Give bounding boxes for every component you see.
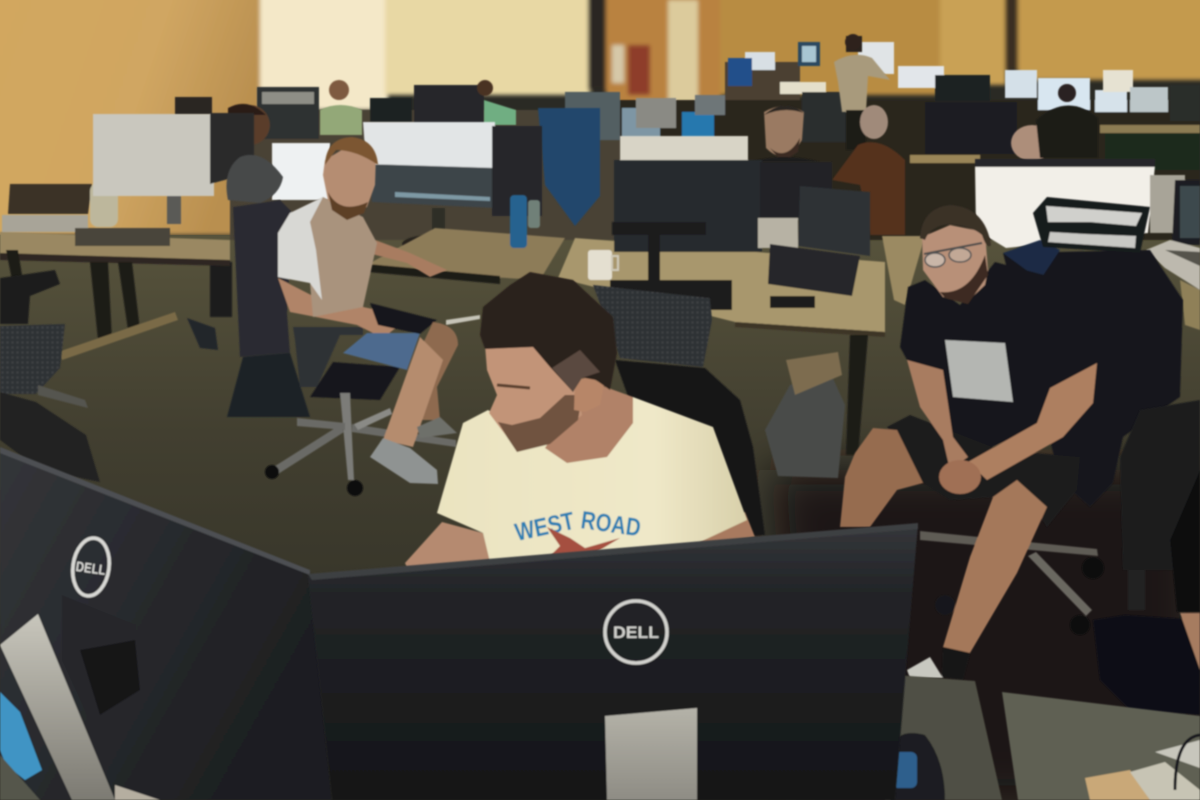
box by backpack bbox=[786, 352, 842, 395]
middle desk bbox=[368, 195, 565, 325]
monitor: white back bbox=[620, 136, 748, 163]
arm right bbox=[700, 512, 755, 545]
torso bbox=[900, 262, 1097, 455]
coworker: teal shirt bbox=[477, 80, 516, 125]
coworker: glasses in middle bbox=[750, 105, 820, 162]
background desks and monitors bbox=[175, 42, 1200, 240]
logo: Dell left: DELL bbox=[75, 558, 107, 578]
monitor: dark beside editor bbox=[492, 126, 542, 216]
laptop: far right bbox=[1146, 180, 1200, 290]
shoe bbox=[942, 647, 970, 680]
shirt bbox=[278, 197, 377, 317]
shirt print: ROAD bbox=[579, 506, 642, 542]
head bbox=[922, 225, 988, 302]
shoes bbox=[370, 438, 438, 484]
stickers bbox=[1085, 740, 1200, 800]
eye and brow bbox=[497, 385, 530, 388]
left desk monitors bbox=[93, 113, 542, 253]
shorts bbox=[343, 333, 420, 370]
man in black t-shirt, right bbox=[840, 197, 1183, 680]
headset bbox=[890, 733, 945, 800]
mug bbox=[588, 250, 618, 280]
man in cream t-shirt, centre bbox=[405, 272, 755, 570]
ear bbox=[574, 377, 604, 412]
chair: left man bbox=[226, 155, 456, 496]
legs bbox=[840, 428, 923, 527]
chair far left edge bbox=[0, 270, 100, 482]
centre desk bbox=[558, 136, 885, 455]
hair fade bbox=[552, 350, 600, 392]
head bbox=[323, 145, 376, 217]
legs bbox=[420, 322, 458, 420]
chair: frame by centre desk bbox=[610, 222, 732, 310]
monitor stand: left bbox=[0, 614, 115, 800]
arms bbox=[907, 360, 968, 470]
shorts bbox=[887, 415, 1080, 527]
desk corner left bbox=[0, 755, 40, 800]
monitor stand: centre bbox=[605, 708, 697, 800]
coworker: green shirt bbox=[320, 80, 362, 135]
arm left bbox=[405, 522, 490, 570]
monitor: silver back bbox=[93, 114, 214, 224]
shirt print bbox=[945, 340, 1013, 402]
foreground monitor left bbox=[0, 447, 332, 800]
shirt bbox=[437, 395, 747, 562]
chair right edge bbox=[1093, 400, 1200, 715]
cable bbox=[1175, 735, 1200, 790]
background coworkers bbox=[187, 34, 1098, 350]
backpack on floor bbox=[765, 372, 845, 478]
logo: Dell left bbox=[69, 536, 113, 598]
arms bbox=[278, 278, 402, 338]
coworker: standing at back bbox=[834, 34, 890, 150]
coworker legs behind chair bbox=[187, 262, 232, 350]
left desk bbox=[0, 183, 230, 360]
coworker: brown shirt bbox=[832, 105, 905, 235]
blue hanging jacket bbox=[538, 108, 600, 226]
monitor: editor screen bbox=[363, 122, 495, 253]
beard bbox=[498, 395, 582, 452]
person at right edge bbox=[1170, 470, 1200, 670]
floor shadow right bbox=[770, 470, 1200, 800]
coworker: seated left, dark bbox=[228, 104, 270, 145]
foreground monitor centre bbox=[308, 523, 918, 800]
monitor: dark back bbox=[210, 113, 254, 184]
laptop: centre desk bbox=[768, 186, 870, 296]
logo: Dell centre bbox=[605, 601, 667, 663]
chair: right man bbox=[920, 197, 1183, 635]
face bbox=[485, 345, 582, 452]
chair behind centre man bbox=[593, 285, 765, 540]
hair bbox=[480, 272, 617, 392]
monitor: large dark back bbox=[614, 160, 832, 252]
man with white t-shirt, left bbox=[226, 137, 458, 496]
shirt print bbox=[512, 506, 642, 558]
shirt print: WEST bbox=[512, 507, 577, 547]
neck bbox=[545, 385, 633, 463]
logo: Dell centre: DELL bbox=[613, 623, 659, 642]
monitor: bright screen bbox=[272, 143, 330, 200]
foreground desk right bbox=[885, 675, 1200, 800]
laptop and items on left desk bbox=[2, 183, 170, 246]
blue cup bbox=[0, 692, 42, 780]
floor bbox=[0, 235, 1200, 800]
right desk and right screen bbox=[882, 159, 1200, 330]
coworker: dark jacket bbox=[1036, 84, 1098, 158]
back wall bbox=[0, 0, 1200, 235]
coworker: seated behind right monitor bbox=[1011, 125, 1053, 161]
monitor: large white screen bbox=[975, 159, 1185, 248]
